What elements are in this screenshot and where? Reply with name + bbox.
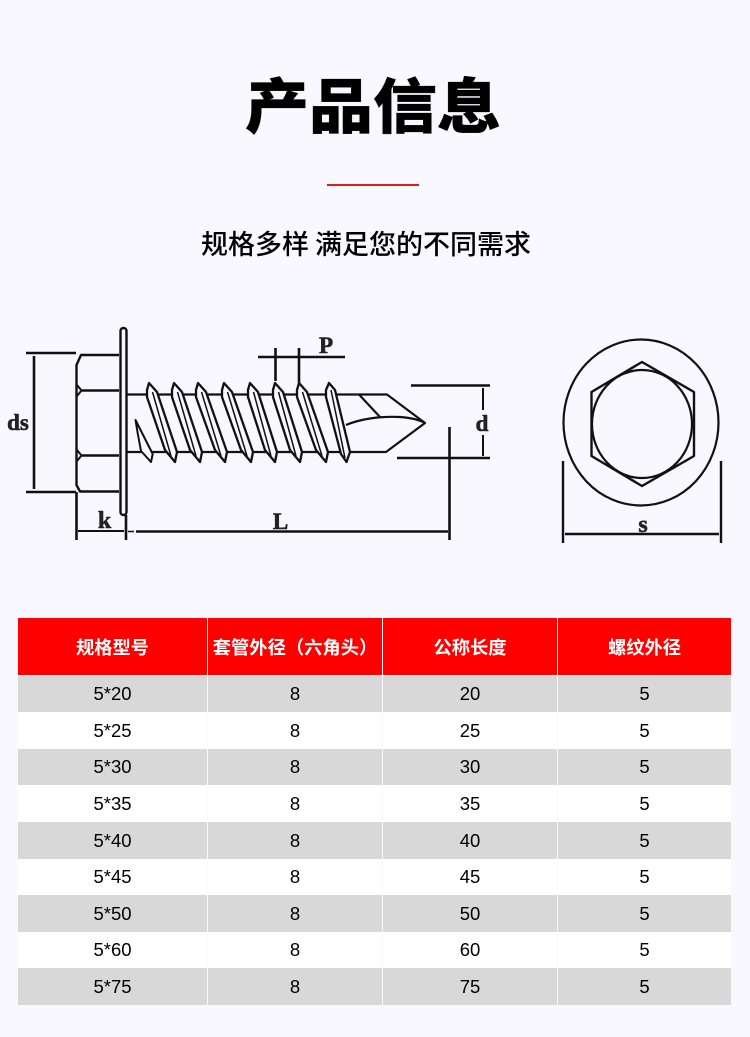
row 5*40: 40 <box>460 830 480 850</box>
icon: hexagon head <box>592 362 694 486</box>
dimension: L: L <box>273 509 288 534</box>
row 5*75 <box>18 968 731 1005</box>
row 5*20: 8 <box>290 683 300 704</box>
dimension: d <box>397 386 490 458</box>
table header: 套管外径（六角头） <box>213 634 377 660</box>
subtitle: 规格多样 满足您的不同需求 <box>201 223 531 262</box>
screw side view <box>76 328 425 515</box>
icon: screw shaft <box>127 394 425 452</box>
table header: 螺纹外径 <box>608 634 681 660</box>
row 5*40: 5*40 <box>93 830 132 850</box>
icon: thread start <box>136 420 153 462</box>
icon: threads <box>147 383 350 462</box>
row 5*30: 30 <box>460 756 480 777</box>
dimension: P <box>258 333 345 383</box>
screw end view <box>564 340 718 506</box>
row 5*30: 5 <box>639 756 650 777</box>
row 5*45: 8 <box>290 866 300 887</box>
row 5*50: 5*50 <box>93 902 132 924</box>
row 5*20: 5*20 <box>93 683 132 704</box>
row 5*60: 5 <box>639 939 650 960</box>
row 5*60: 60 <box>460 939 480 960</box>
icon: flange circle <box>564 340 718 506</box>
dimension: d: d <box>476 411 489 436</box>
row 5*20: 5 <box>639 683 650 704</box>
row 5*25: 5 <box>639 720 650 740</box>
dimension: s <box>563 461 721 543</box>
icon: washer flange <box>120 328 126 515</box>
row 5*20: 20 <box>460 683 480 704</box>
row 5*30: 8 <box>290 756 300 777</box>
row 5*50: 50 <box>460 902 480 924</box>
row 5*35: 5*35 <box>93 792 132 814</box>
row 5*40: 5 <box>639 830 650 850</box>
dimension: k <box>76 492 126 540</box>
table header: 公称长度 <box>433 634 507 660</box>
row 5*50: 8 <box>290 902 300 924</box>
row 5*45 <box>93 866 650 887</box>
dimension: k: k <box>98 508 112 534</box>
title: 产品信息 <box>245 60 501 146</box>
row 5*25: 5*25 <box>93 720 132 740</box>
row 5*50: 5 <box>639 902 650 924</box>
row 5*60: 8 <box>290 939 300 960</box>
spec table <box>18 618 731 1005</box>
table header <box>18 618 731 675</box>
dimension: ds <box>7 353 76 492</box>
row 5*45: 45 <box>460 866 480 887</box>
row 5*35: 8 <box>290 792 300 814</box>
row 5*60 <box>93 939 650 960</box>
dimension: ds: ds <box>7 410 29 435</box>
row 5*25 <box>93 720 650 740</box>
row 5*25: 8 <box>290 720 300 740</box>
row 5*30 <box>18 749 731 785</box>
row 5*45: 5 <box>639 866 650 887</box>
row 5*35 <box>93 792 650 814</box>
row 5*50 <box>18 895 731 932</box>
icon: inner circle <box>592 370 692 478</box>
red divider <box>327 184 419 186</box>
icon: hex head <box>76 355 119 492</box>
row 5*40: 8 <box>290 830 300 850</box>
row 5*30: 5*30 <box>93 756 132 777</box>
diagram: screw dimensions <box>7 326 722 543</box>
row 5*60: 5*60 <box>93 939 132 960</box>
dimension: s: s <box>638 512 648 538</box>
row 5*75: 5*75 <box>93 976 132 996</box>
row 5*75: 8 <box>290 976 300 996</box>
dimension: P: P <box>319 333 333 358</box>
row 5*75: 75 <box>460 976 480 996</box>
table header: 规格型号 <box>76 634 149 660</box>
row 5*35: 5 <box>639 792 650 814</box>
row 5*20 <box>18 676 731 712</box>
row 5*25: 25 <box>460 720 480 740</box>
row 5*45: 5*45 <box>93 866 132 887</box>
row 5*35: 35 <box>460 792 480 814</box>
row 5*75: 5 <box>639 976 650 996</box>
row 5*40 <box>18 822 731 859</box>
